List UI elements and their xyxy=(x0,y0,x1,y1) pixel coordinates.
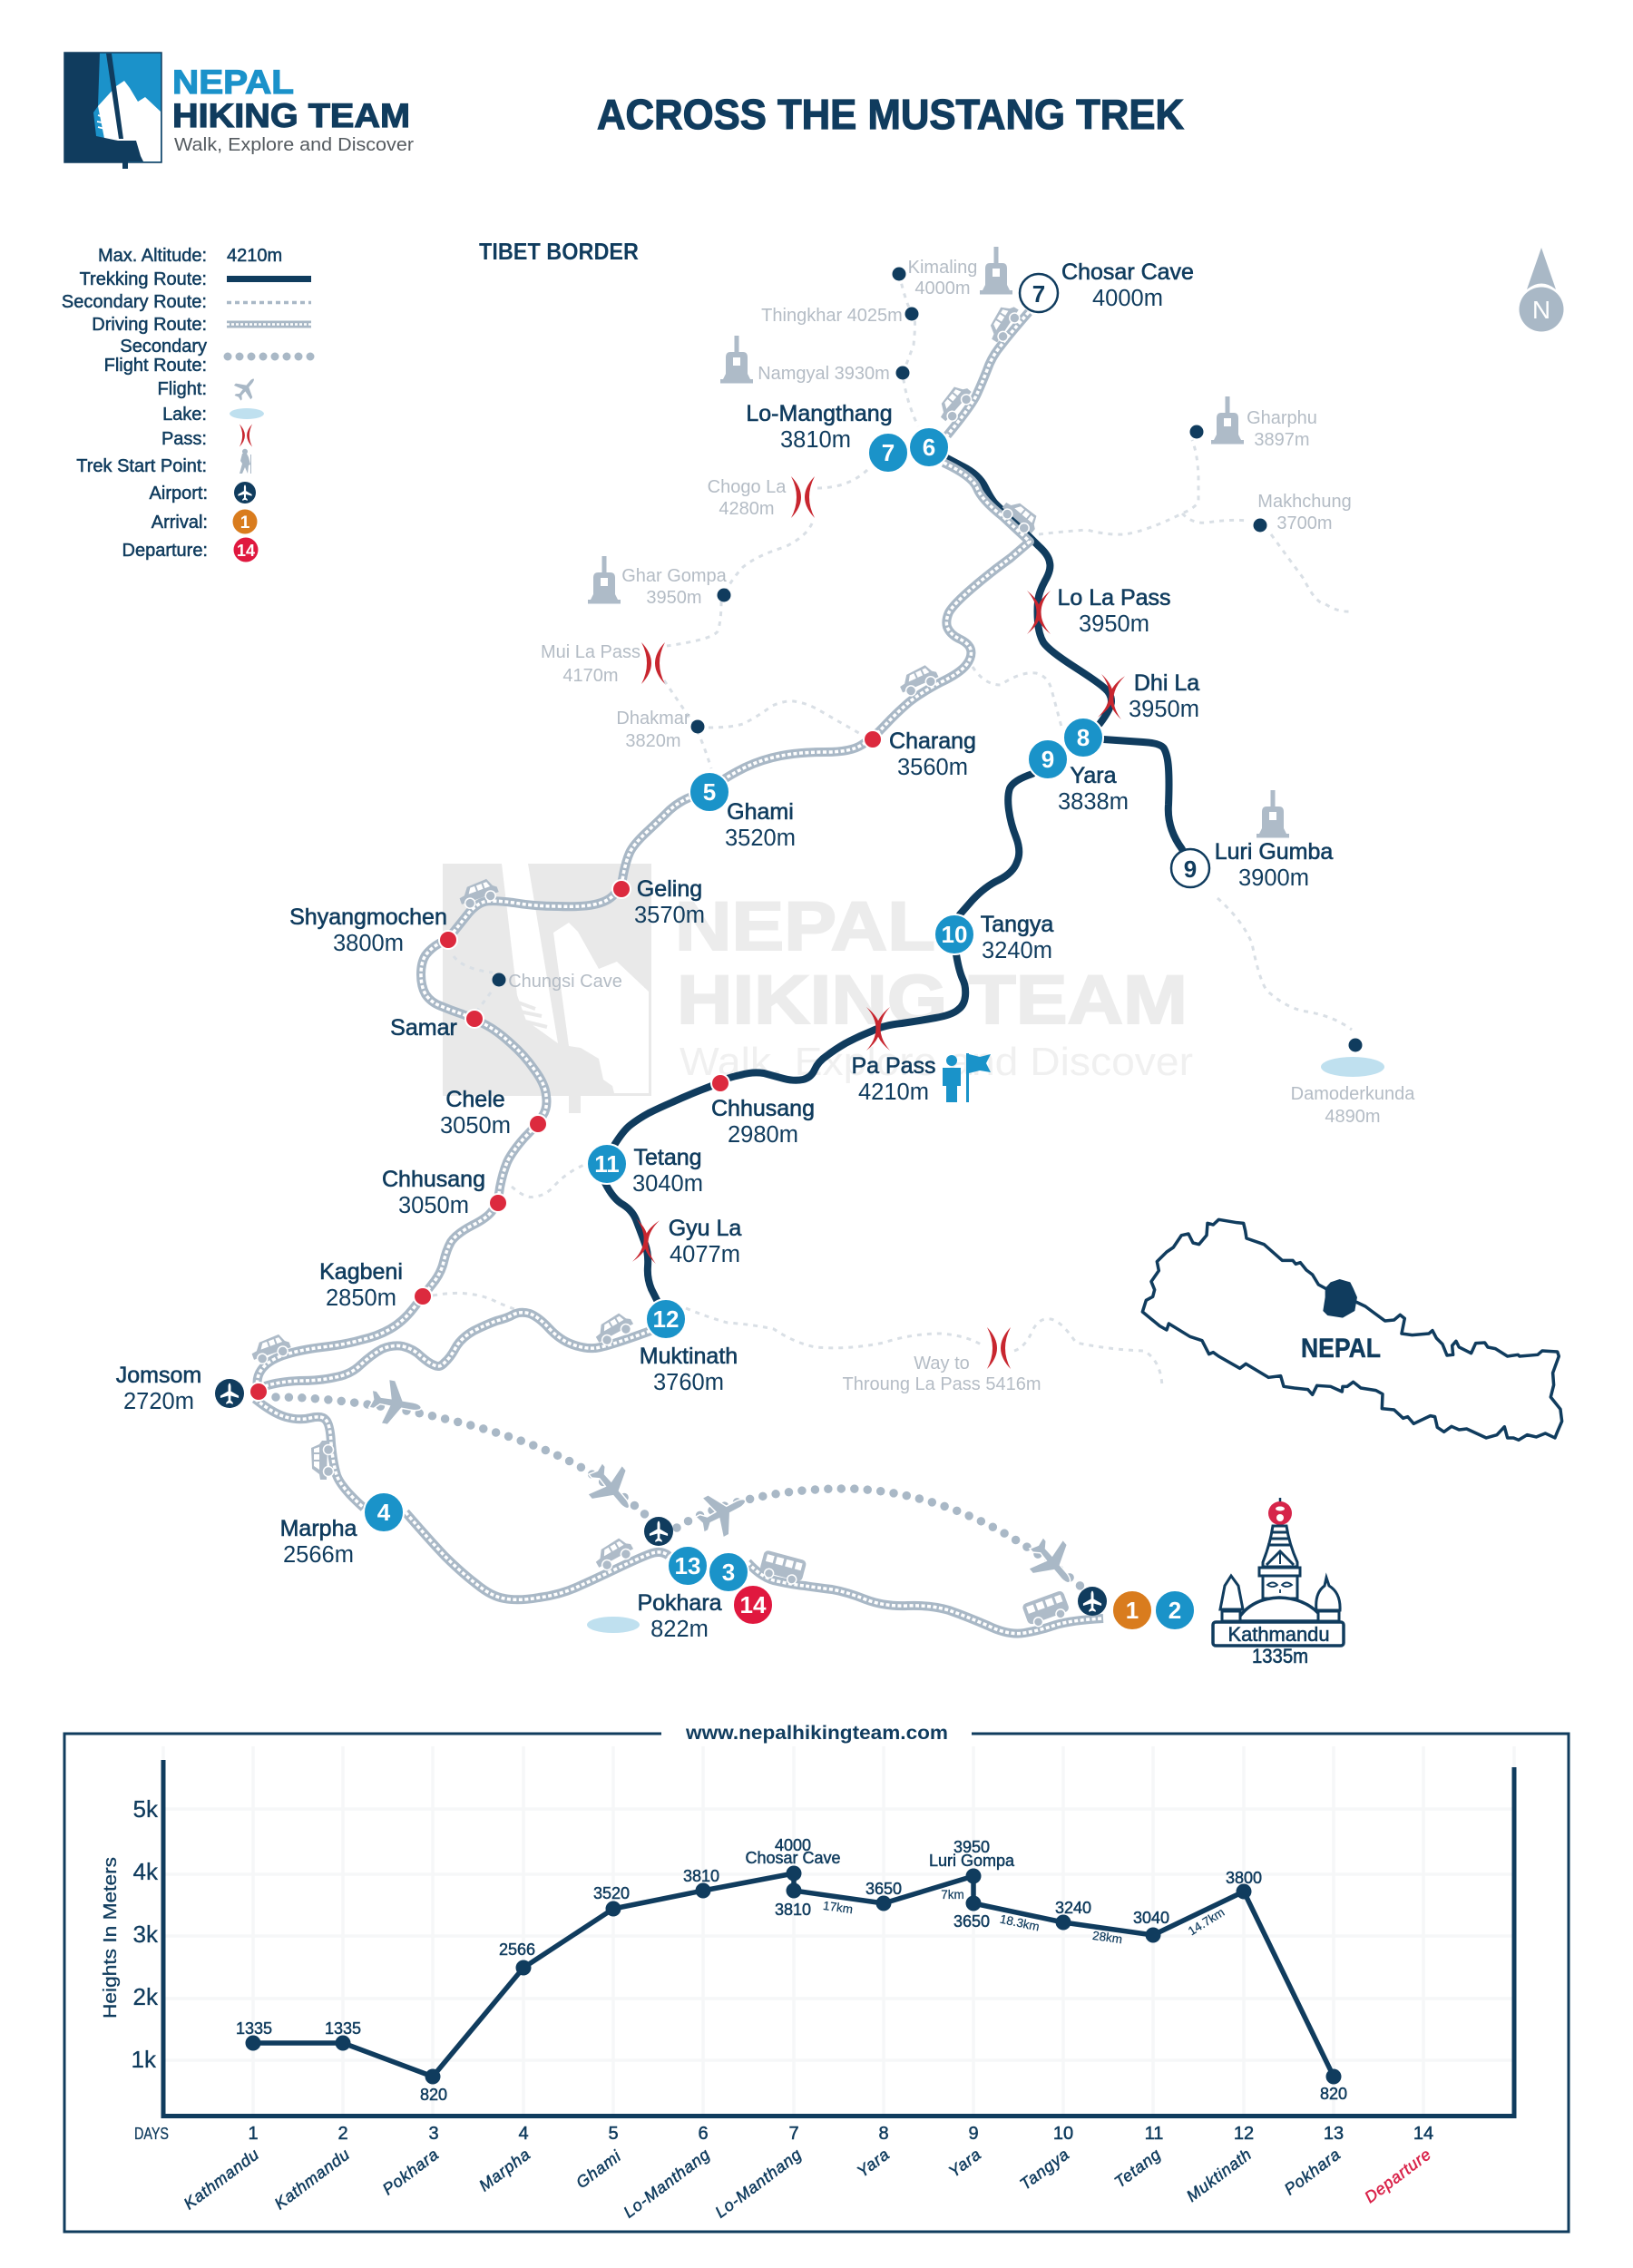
legend: Pass: xyxy=(161,429,207,449)
legend: Secondary Route: xyxy=(62,292,207,312)
x axis place names: Departure xyxy=(1361,2145,1434,2206)
website: www.nepalhikingteam.com xyxy=(685,1723,948,1744)
altitude values: 18.3km xyxy=(999,1912,1041,1934)
altitude values: 820 xyxy=(420,2086,447,2104)
secondary place labels: 3950m xyxy=(646,588,702,608)
day markers: 3 xyxy=(722,1559,735,1586)
x axis place names: Yara xyxy=(854,2145,893,2181)
main place labels: 3950m xyxy=(1129,697,1199,722)
watermark text: Walk, Explore and Discover xyxy=(680,1040,1193,1084)
Nepal map: NEPAL xyxy=(1301,1334,1381,1364)
brand name: Walk, Explore and Discover xyxy=(174,135,414,155)
legend: Departure: xyxy=(122,541,208,561)
altitude values: 28km xyxy=(1091,1929,1123,1946)
main place labels: 3760m xyxy=(653,1370,724,1395)
watermark text xyxy=(675,888,1193,1084)
secondary place labels: Makhchung xyxy=(1257,492,1352,512)
secondary place labels: 3897m xyxy=(1254,430,1310,450)
x axis place names: Tetang xyxy=(1111,2145,1164,2191)
watermark logo xyxy=(443,864,651,1113)
stop dots xyxy=(249,730,882,1401)
Kathmandu stupa xyxy=(1213,1498,1344,1667)
main place labels: 3050m xyxy=(398,1193,469,1218)
altitude values: 3040 xyxy=(1133,1909,1169,1927)
x axis day numbers: 13 xyxy=(1324,2124,1344,2144)
main place labels: 3570m xyxy=(634,903,705,928)
day markers: 6 xyxy=(923,434,935,461)
brand name: NEPAL xyxy=(172,64,294,101)
x axis day numbers: 7 xyxy=(788,2124,799,2144)
altitude values: 3810 xyxy=(775,1901,811,1919)
x axis place names: Marpha xyxy=(475,2145,533,2195)
main place labels xyxy=(116,259,1333,1642)
legend: Secondary xyxy=(120,337,207,357)
x axis place names: Lo-Manthang xyxy=(621,2145,713,2222)
x axis day numbers: 10 xyxy=(1053,2124,1073,2144)
lakes xyxy=(587,1057,1384,1633)
main place labels: Chosar Cave xyxy=(1061,259,1194,285)
x axis place names xyxy=(181,2145,1434,2222)
altitude values: 3650 xyxy=(865,1880,902,1898)
day markers: 9 xyxy=(1184,855,1197,883)
y axis labels: 5k xyxy=(133,1795,159,1823)
main place labels: Muktinath xyxy=(640,1344,738,1369)
secondary place labels: 4170m xyxy=(562,666,619,686)
elevation chart frame xyxy=(64,1734,1569,2232)
main place labels: Marpha xyxy=(280,1516,357,1541)
legend: Max. Altitude: xyxy=(98,246,207,266)
chart axes xyxy=(163,1760,1514,2116)
x axis day numbers: 1 xyxy=(248,2124,259,2144)
main place labels: 3950m xyxy=(1079,611,1149,637)
main place labels: Tangya xyxy=(981,912,1053,937)
x axis place names: Pokhara xyxy=(379,2145,442,2198)
main place labels: Jomsom xyxy=(116,1363,201,1388)
altitude values: 7km xyxy=(941,1888,964,1901)
driving route: Marpha to Pokhara xyxy=(406,1512,669,1599)
legend: 1 xyxy=(240,513,250,533)
driving route: Pokhara to Kathmandu xyxy=(748,1562,1103,1634)
main place labels: Lo-Mangthang xyxy=(746,401,893,426)
main place labels: 4077m xyxy=(670,1242,740,1267)
day markers: 4 xyxy=(377,1499,391,1526)
main place labels: 3040m xyxy=(632,1171,703,1197)
x axis place names: Yara xyxy=(945,2145,984,2181)
main place labels: Charang xyxy=(889,728,976,754)
Kathmandu stupa: 1335m xyxy=(1252,1645,1308,1667)
secondary routes xyxy=(433,274,1352,1387)
main place labels: 4210m xyxy=(858,1080,929,1105)
x axis place names: Ghami xyxy=(572,2146,625,2192)
main place labels: 3838m xyxy=(1058,789,1129,815)
secondary place labels: 3700m xyxy=(1276,513,1333,533)
day markers: 7 xyxy=(1032,280,1045,308)
x axis place names: Kathmandu xyxy=(181,2145,262,2213)
day markers: 14 xyxy=(740,1591,767,1618)
brand name: HIKING TEAM xyxy=(172,97,410,134)
altitude values: 3240 xyxy=(1055,1899,1091,1917)
main place labels: Chhusang xyxy=(711,1096,815,1121)
secondary place labels: Damoderkunda xyxy=(1291,1084,1415,1104)
x axis day numbers: 14 xyxy=(1413,2124,1433,2144)
altitude values: 2566 xyxy=(499,1941,535,1959)
main place labels: 4000m xyxy=(1092,286,1163,311)
chart grid xyxy=(163,1746,1514,2114)
main place labels: Chele xyxy=(445,1087,505,1112)
driving route: Chosar to Lo-Mangthang xyxy=(947,312,1029,435)
altitude values: 820 xyxy=(1320,2085,1347,2103)
x axis place names: Lo-Manthang xyxy=(712,2145,805,2222)
flight route: Jomsom to Pokhara xyxy=(276,1397,648,1517)
main place labels: 2850m xyxy=(326,1286,396,1311)
main place labels: Samar xyxy=(390,1015,457,1041)
legend: Airport: xyxy=(150,484,208,503)
main place labels: Geling xyxy=(637,876,702,902)
main place labels: 3900m xyxy=(1238,865,1309,891)
altitude values: Chosar Cave xyxy=(745,1849,841,1867)
y axis labels: 3k xyxy=(133,1921,159,1948)
legend: 14 xyxy=(237,542,255,560)
x axis day numbers: DAYS xyxy=(134,2125,169,2143)
y axis title: Heights In Meters xyxy=(101,1857,121,2019)
x axis day numbers xyxy=(134,2124,1433,2144)
day markers: 11 xyxy=(594,1150,620,1178)
altitude values: 3810 xyxy=(683,1867,719,1885)
compass xyxy=(1519,248,1564,332)
legend: 4210m xyxy=(227,246,282,266)
day markers: 8 xyxy=(1077,724,1090,751)
compass: N xyxy=(1532,296,1550,324)
x axis day numbers: 11 xyxy=(1145,2124,1163,2144)
secondary place labels: Chogo La xyxy=(708,477,787,497)
Nepal map xyxy=(1142,1219,1562,1440)
main place labels: Tetang xyxy=(633,1145,702,1170)
y axis labels xyxy=(132,1795,159,2073)
day markers: 13 xyxy=(675,1552,700,1579)
x axis place names: Pokhara xyxy=(1281,2145,1344,2198)
day markers: 5 xyxy=(703,778,716,806)
x axis day numbers: 8 xyxy=(878,2124,889,2144)
Tibet border label: TIBET BORDER xyxy=(479,238,639,265)
secondary place labels: Throung La Pass 5416m xyxy=(842,1374,1041,1394)
airports xyxy=(215,1379,1107,1616)
day markers: 10 xyxy=(942,921,967,948)
main place labels: 2980m xyxy=(728,1122,798,1148)
logo xyxy=(64,53,161,169)
altitude values: 17km xyxy=(822,1899,854,1916)
legend: Driving Route: xyxy=(92,315,207,335)
altitude values: 3520 xyxy=(593,1884,630,1902)
main place labels: 3560m xyxy=(897,755,968,780)
main place labels: Pokhara xyxy=(637,1590,722,1616)
legend: Flight Route: xyxy=(104,356,207,376)
main place labels: Kagbeni xyxy=(319,1259,403,1285)
altitude values: 4000 xyxy=(775,1836,811,1854)
main place labels: Ghami xyxy=(727,799,794,825)
Kathmandu stupa: Kathmandu xyxy=(1228,1623,1330,1646)
altitude values: 3800 xyxy=(1226,1869,1262,1887)
monasteries xyxy=(588,247,1289,838)
altitude values: 3650 xyxy=(953,1912,990,1931)
vehicles xyxy=(249,301,1071,1629)
driving route: Lo-Mangthang to Jomsom xyxy=(258,463,1030,1391)
day markers: 1 xyxy=(1126,1597,1139,1624)
passes xyxy=(632,476,1125,1369)
side place dots xyxy=(492,267,1363,1052)
secondary place labels: Dhakmar xyxy=(616,709,690,728)
altitude line xyxy=(245,1865,1341,2085)
legend: Trekking Route: xyxy=(80,269,207,289)
altitude values: 3950 xyxy=(953,1838,990,1856)
secondary place labels: Ghar Gompa xyxy=(621,566,728,586)
main place labels: Chhusang xyxy=(382,1167,485,1192)
legend xyxy=(62,246,313,562)
altitude values: Luri Gompa xyxy=(929,1852,1015,1870)
day markers xyxy=(364,274,1209,1630)
altitude values: 1335 xyxy=(325,2019,361,2038)
secondary place labels: 4280m xyxy=(719,499,775,519)
main place labels: 2566m xyxy=(283,1542,354,1568)
secondary place labels: Namgyal 3930m xyxy=(758,364,890,384)
main place labels: 2720m xyxy=(123,1389,194,1414)
x axis day numbers: 3 xyxy=(428,2124,439,2144)
secondary place labels: Chungsi Cave xyxy=(508,972,622,992)
main place labels: 3800m xyxy=(333,931,404,956)
x axis day numbers: 4 xyxy=(518,2124,529,2144)
main place labels: 3240m xyxy=(982,938,1052,963)
legend: Arrival: xyxy=(152,513,208,533)
hiker and flag xyxy=(943,1053,991,1102)
main place labels: Lo La Pass xyxy=(1057,585,1171,611)
secondary place labels: Thingkhar 4025m xyxy=(761,306,903,326)
flight route: Pokhara to Kathmandu xyxy=(677,1489,1082,1588)
secondary place labels: 4000m xyxy=(914,279,971,298)
title: ACROSS THE MUSTANG TREK xyxy=(597,91,1184,138)
altitude values: 14.7km xyxy=(1186,1905,1227,1938)
main place labels: Yara xyxy=(1071,763,1117,788)
secondary place labels: Gharphu xyxy=(1247,408,1317,428)
secondary place labels: 4890m xyxy=(1325,1107,1381,1127)
y axis labels: 4k xyxy=(133,1858,159,1885)
main place labels: Luri Gumba xyxy=(1215,839,1333,865)
main place labels: 822m xyxy=(650,1617,709,1642)
secondary place labels xyxy=(508,258,1415,1394)
x axis place names: Muktinath xyxy=(1183,2145,1255,2205)
main place labels: Gyu La xyxy=(669,1216,741,1241)
x axis place names: Kathmandu xyxy=(271,2145,353,2213)
day markers: 12 xyxy=(653,1305,679,1333)
legend: Lake: xyxy=(162,405,207,425)
x axis day numbers: 2 xyxy=(337,2124,348,2144)
main place labels: Dhi La xyxy=(1134,670,1199,696)
main place labels: Pa Pass xyxy=(851,1053,936,1079)
x axis day numbers: 6 xyxy=(698,2124,709,2144)
x axis day numbers: 5 xyxy=(608,2124,619,2144)
brand name xyxy=(172,64,414,155)
day markers: 2 xyxy=(1169,1597,1181,1624)
day markers: 7 xyxy=(882,439,895,466)
day markers: 9 xyxy=(1041,746,1054,773)
main place labels: Shyangmochen xyxy=(289,904,447,930)
legend: Trek Start Point: xyxy=(76,456,207,476)
legend: Flight: xyxy=(158,379,207,399)
watermark text: HIKING TEAM xyxy=(677,962,1188,1039)
altitude values: 1335 xyxy=(236,2019,272,2038)
trekking route xyxy=(605,458,1182,1300)
main place labels: 3050m xyxy=(440,1113,511,1139)
secondary place labels: Mui La Pass xyxy=(541,642,640,662)
y axis labels: 1k xyxy=(132,2046,157,2073)
x axis day numbers: 12 xyxy=(1234,2124,1254,2144)
driving route: Jomsom to Marpha xyxy=(255,1399,364,1508)
secondary place labels: Kimaling xyxy=(908,258,977,278)
secondary place labels: Way to xyxy=(914,1354,970,1374)
main place labels: 3810m xyxy=(780,427,851,453)
altitude values xyxy=(236,1836,1347,2104)
driving route: Jomsom to Muktinath xyxy=(265,1313,650,1386)
watermark text: NEPAL xyxy=(675,888,935,965)
secondary place labels: 3820m xyxy=(625,731,681,751)
main place labels: 3520m xyxy=(725,826,796,851)
planes xyxy=(367,1378,1086,1596)
y axis labels: 2k xyxy=(133,1983,159,2010)
x axis day numbers: 9 xyxy=(968,2124,979,2144)
x axis place names: Tangya xyxy=(1016,2145,1072,2194)
